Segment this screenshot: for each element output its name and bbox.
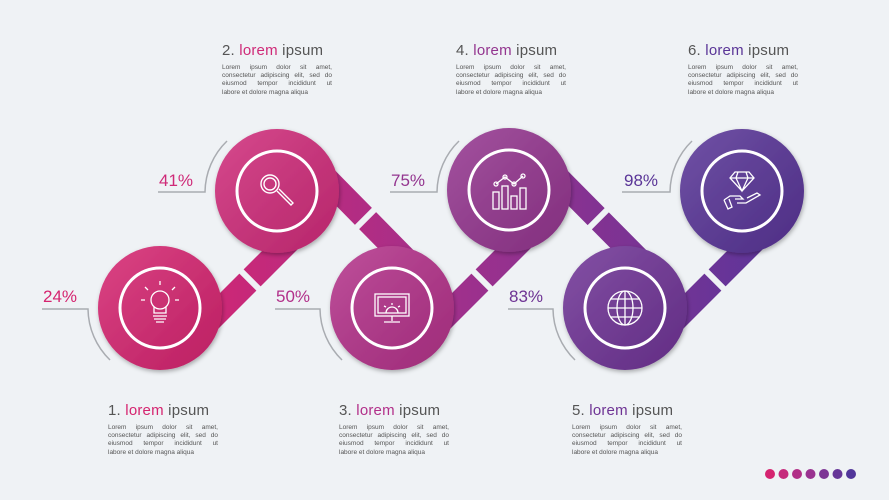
text block 2: labore et dolore magna aliqua (222, 89, 308, 96)
percentages: 83% (509, 287, 543, 306)
percentages: 98% (624, 171, 658, 190)
text block 3 (339, 402, 449, 456)
text block 6: eiusmod tempor incididunt ut (688, 80, 798, 87)
text block 4: consectetur adipiscing elit, sed do (456, 72, 566, 79)
text block 2: 2. lorem ipsum (222, 42, 323, 59)
text block 3: labore et dolore magna aliqua (339, 449, 425, 456)
text block 5: Lorem ipsum dolor sit amet, (572, 424, 682, 431)
text block 2: Lorem ipsum dolor sit amet, (222, 64, 332, 71)
text block 5: labore et dolore magna aliqua (572, 449, 658, 456)
text block 4 (456, 42, 566, 96)
text block 1: Lorem ipsum dolor sit amet, (108, 424, 218, 431)
circle 2 (215, 129, 339, 253)
dots (765, 469, 856, 479)
text block 5 (572, 402, 682, 456)
text block 1: consectetur adipiscing elit, sed do (108, 432, 218, 439)
text block 3: 3. lorem ipsum (339, 402, 440, 419)
percentages: 24% (43, 287, 77, 306)
connector bands (191, 160, 773, 339)
text block 3: Lorem ipsum dolor sit amet, (339, 424, 449, 431)
text block 2: eiusmod tempor incididunt ut (222, 80, 332, 87)
text block 5: eiusmod tempor incididunt ut (572, 440, 682, 447)
circle 1 (98, 246, 222, 370)
text block 1: eiusmod tempor incididunt ut (108, 440, 218, 447)
text block 6 (688, 42, 798, 96)
text block 4: Lorem ipsum dolor sit amet, (456, 64, 566, 71)
text block 5: 5. lorem ipsum (572, 402, 673, 419)
text block 4: labore et dolore magna aliqua (456, 89, 542, 96)
text block 2 (222, 42, 332, 96)
text block 6: 6. lorem ipsum (688, 42, 789, 59)
percentages (43, 171, 658, 306)
circle 4 (447, 128, 571, 252)
text block 6: consectetur adipiscing elit, sed do (688, 72, 798, 79)
text block 1 (108, 402, 218, 456)
text block 6: labore et dolore magna aliqua (688, 89, 774, 96)
percentages: 41% (159, 171, 193, 190)
text block 4: 4. lorem ipsum (456, 42, 557, 59)
text block 1: labore et dolore magna aliqua (108, 449, 194, 456)
circle 6 (680, 129, 804, 253)
text block 4: eiusmod tempor incididunt ut (456, 80, 566, 87)
text block 5: consectetur adipiscing elit, sed do (572, 432, 682, 439)
circle 5 (563, 246, 687, 370)
circle 3 (330, 246, 454, 370)
text block 3: eiusmod tempor incididunt ut (339, 440, 449, 447)
percentages: 50% (276, 287, 310, 306)
percentages: 75% (391, 171, 425, 190)
gray arcs (42, 141, 692, 360)
text block 6: Lorem ipsum dolor sit amet, (688, 64, 798, 71)
text block 3: consectetur adipiscing elit, sed do (339, 432, 449, 439)
text block 2: consectetur adipiscing elit, sed do (222, 72, 332, 79)
text block 1: 1. lorem ipsum (108, 402, 209, 419)
